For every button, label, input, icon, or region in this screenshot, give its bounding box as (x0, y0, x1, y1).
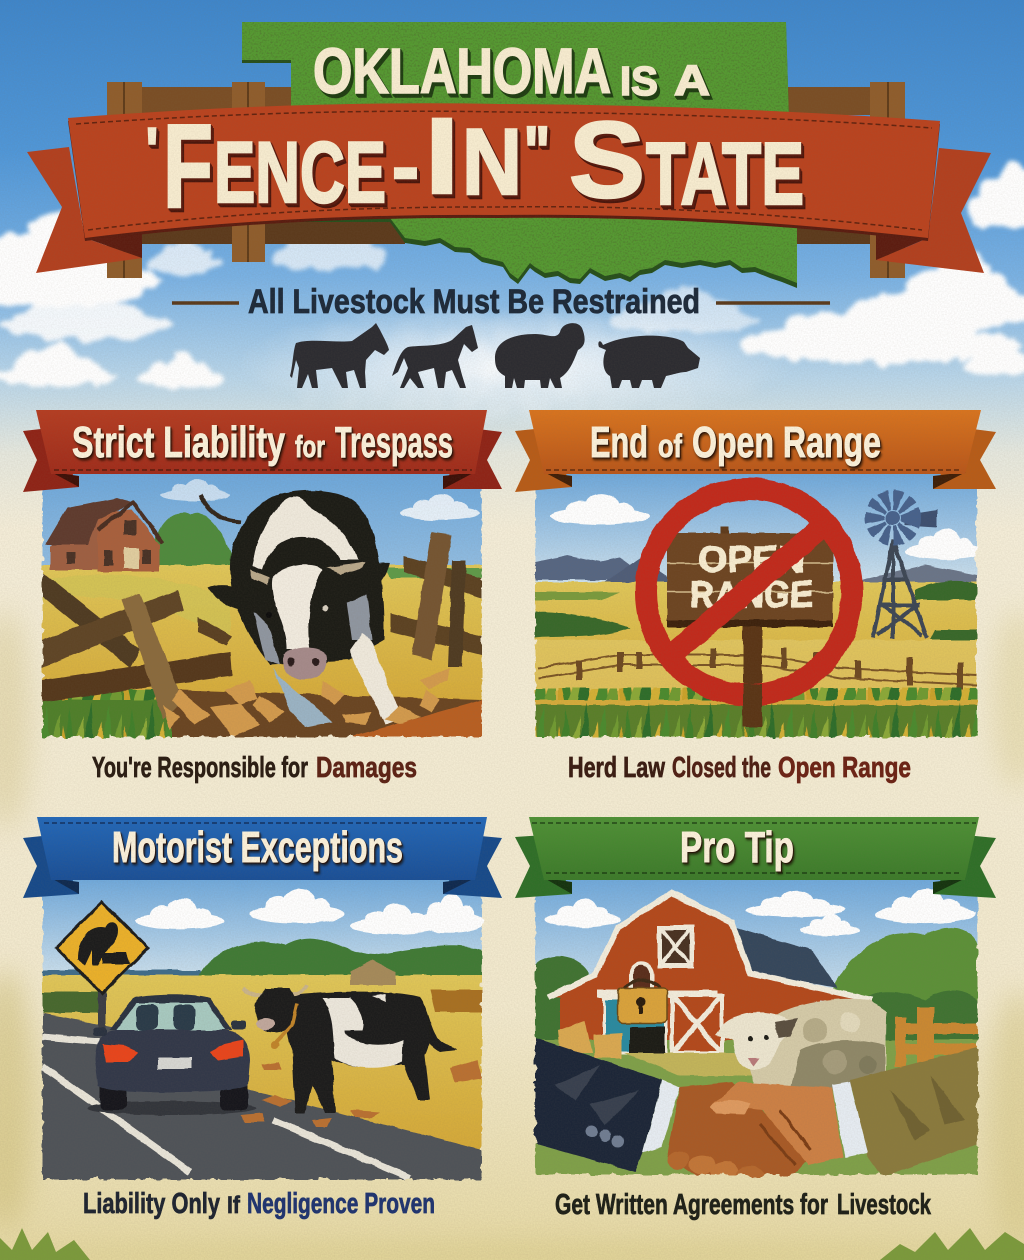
panel: motorist exceptions (23, 817, 502, 1220)
panel: pro tip (515, 817, 996, 1221)
livestock silhouettes (290, 323, 700, 388)
caption: Closed the (672, 752, 771, 784)
title line 2: F (163, 100, 213, 233)
illustration: car stopped by loose cow (42, 875, 485, 1180)
illustration: closed open range sign (535, 470, 985, 738)
illustration: cow breaking through a fence (42, 470, 482, 740)
title line 2: TATE (646, 124, 804, 223)
broken fence, left (42, 572, 232, 720)
caption: If (227, 1192, 241, 1219)
caption: Get Written Agreements for (555, 1189, 828, 1221)
icon: sheep silhouette (495, 323, 585, 388)
title line 2: I (425, 95, 459, 216)
sign text: RANGE (690, 574, 813, 615)
banner heading: Strict Liability (72, 418, 285, 467)
icon: pig silhouette (598, 336, 700, 388)
sign text: OPEN (698, 539, 805, 580)
sheep (715, 999, 887, 1090)
corner grass (0, 1228, 1024, 1260)
banner heading: for (295, 429, 325, 464)
wooden sign (667, 527, 833, 627)
banner: blue (23, 817, 502, 898)
cow standing on the roadside (243, 985, 457, 1113)
caption (568, 752, 911, 784)
car (87, 994, 257, 1115)
handshake (533, 1037, 980, 1188)
banner: red (23, 410, 502, 492)
parchment ground patches (0, 610, 1024, 1260)
title line 2: ENCE (214, 125, 386, 221)
banner left tail (27, 147, 142, 273)
banner heading: of (658, 428, 682, 464)
Oklahoma state silhouette (242, 22, 797, 288)
caption: You're Responsible for (92, 752, 308, 784)
title line 2: N (462, 109, 522, 214)
distant rail fence (538, 648, 977, 690)
title line 1: A (674, 57, 710, 105)
caption: Liability Only (83, 1188, 220, 1220)
barn (548, 893, 872, 1058)
illustration: barn, sheep and handshake (533, 875, 980, 1188)
banner heading: Pro Tip (680, 823, 794, 872)
header: fence, Oklahoma map and title banner (27, 22, 991, 288)
banner heading (590, 418, 881, 467)
subtitle with side rules: All Livestock Must Be Restrained (248, 283, 700, 321)
banner: orange (515, 410, 996, 492)
title line 2: ' (146, 116, 158, 183)
banner heading: Open Range (692, 418, 881, 467)
ranch fence (895, 1007, 978, 1067)
road (42, 1013, 482, 1180)
caption: Open Range (778, 752, 911, 784)
sign post (742, 626, 762, 684)
panel: strict liability for trespass (23, 410, 502, 784)
caption: Herd Law (568, 752, 665, 784)
banner heading: Motorist Exceptions (112, 823, 403, 872)
rocks (240, 1060, 482, 1127)
sign text (691, 544, 812, 608)
caption (83, 1188, 435, 1220)
banner heading: Trespass (335, 418, 453, 467)
road sign (56, 902, 148, 1032)
padlock (618, 981, 667, 1023)
icon: horse silhouette (392, 325, 478, 388)
banner right tail (876, 148, 991, 273)
caption: Damages (316, 752, 417, 784)
caption: Negligence Proven (247, 1188, 435, 1220)
banner: green (515, 817, 996, 898)
panel: end of open range (515, 410, 996, 784)
title line 2: S (569, 99, 645, 220)
broken fence, right (390, 532, 482, 667)
clouds (0, 162, 1024, 427)
prohibition sign (646, 489, 852, 695)
wooden fence behind the title (107, 82, 905, 278)
banner heading: End (590, 418, 648, 467)
cow (200, 490, 405, 727)
title line 2: " (524, 112, 550, 190)
icon: cow silhouette (290, 323, 389, 388)
main red banner (68, 103, 940, 241)
wood chips (163, 668, 450, 737)
caption: Livestock (837, 1189, 932, 1221)
title line 2: - (392, 122, 419, 211)
windmill (873, 500, 937, 638)
title line 1: IS (620, 58, 658, 104)
title line 1: OKLAHOMA (313, 35, 611, 107)
title line 2 (146, 95, 804, 233)
